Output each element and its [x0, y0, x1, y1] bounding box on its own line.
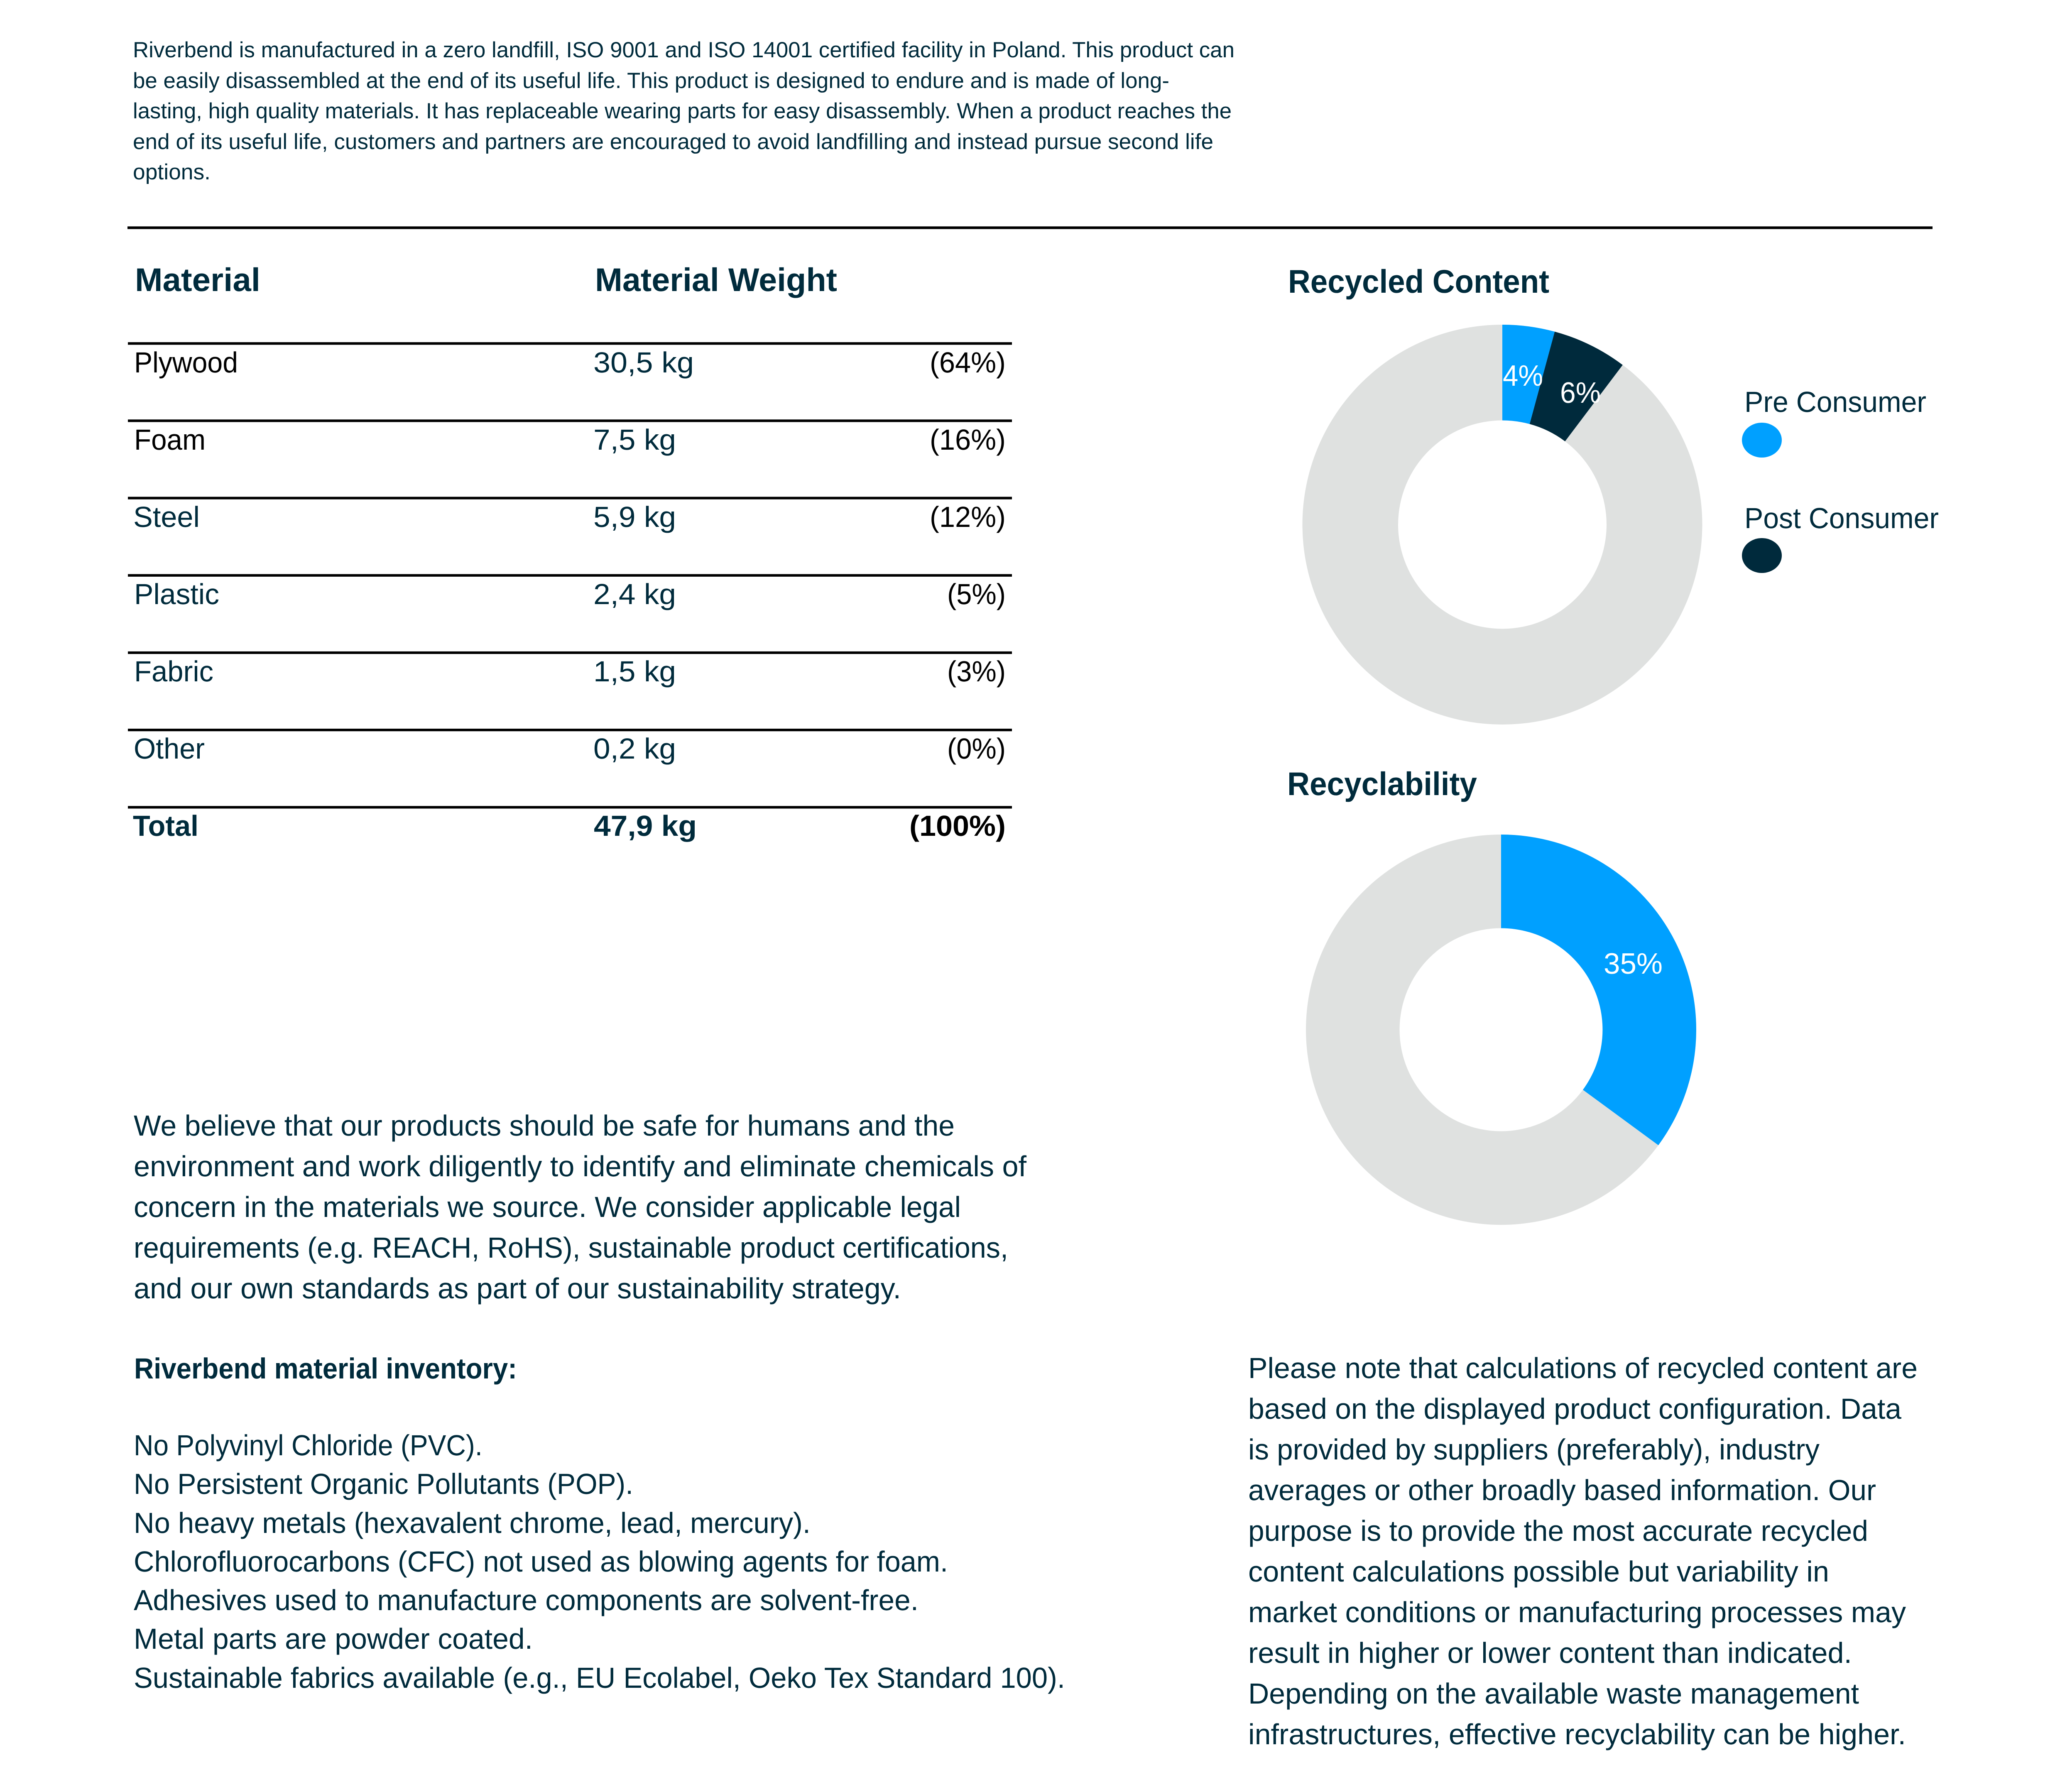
- legend item: pre consumer: Pre Consumer: [1744, 386, 1926, 418]
- text block: calculation note: purpose is to provide the most accurate recycled: [1248, 1515, 1868, 1547]
- row: plastic: (5%): [947, 578, 1006, 610]
- row: fabric: [134, 655, 1006, 688]
- text block: chemicals statement: concern in the materials we source. We consider applicable legal: [134, 1191, 961, 1223]
- row: steel: 5,9 kg: [593, 501, 676, 533]
- intro text block: end of its useful life, customers and partners are encouraged to avoid landfilling and instead pursue second life: [133, 130, 1213, 154]
- table header: Material Weight: [595, 261, 837, 298]
- row: steel: Steel: [133, 501, 200, 533]
- text block: chemicals statement: requirements (e.g. REACH, RoHS), sustainable product certifications,: [134, 1231, 1008, 1264]
- text block: chemicals statement: environment and work diligently to identify and eliminate chemicals of: [134, 1150, 1027, 1182]
- row: plastic: [134, 578, 1006, 610]
- row: plastic: 2,4 kg: [593, 578, 676, 610]
- row: plywood: Plywood: [134, 346, 238, 379]
- text block: material inventory list: Sustainable fabrics available (e.g., EU Ecolabel, Oeko Tex Standard 100).: [134, 1662, 1065, 1694]
- text block: calculation note: result in higher or lower content than indicated.: [1248, 1637, 1852, 1669]
- slice: recyclable share: [1501, 835, 1696, 1145]
- legend item: post consumer: Post Consumer: [1744, 502, 1939, 534]
- intro text block: be easily disassembled at the end of its useful life. This product is designed to endure and is made of long-: [133, 69, 1169, 93]
- donut chart: recycled content: [1302, 325, 1702, 725]
- row: foam: [134, 424, 1006, 456]
- heading: recycled content: Recycled Content: [1288, 263, 1549, 300]
- row: foam: 7,5 kg: [593, 424, 676, 456]
- slice: post consumer: [1530, 332, 1623, 441]
- row: plywood: 30,5 kg: [593, 346, 694, 379]
- row: total: (100%): [909, 810, 1006, 842]
- text block: material inventory list: No Polyvinyl Chloride (PVC).: [134, 1429, 483, 1462]
- value label: 6%: 6%: [1560, 377, 1601, 409]
- text block: calculation note: based on the displayed product configuration. Data: [1248, 1393, 1901, 1425]
- value label: 4%: 4%: [1503, 360, 1543, 392]
- row: total: Total: [133, 810, 198, 842]
- slice: pre consumer: [1502, 325, 1555, 424]
- row: other: (0%): [947, 732, 1006, 765]
- intro text block: Riverbend is manufactured in a zero landfill, ISO 9001 and ISO 14001 certified facility in Poland. This product can: [133, 38, 1235, 62]
- table header: [135, 261, 837, 298]
- legend item: post consumer: [1742, 502, 1939, 573]
- row: total: 47,9 kg: [594, 810, 697, 842]
- legend item: pre consumer: [1742, 386, 1926, 458]
- text block: material inventory list: Adhesives used to manufacture components are solvent-free.: [134, 1584, 919, 1616]
- intro text block: options.: [133, 160, 211, 184]
- table header: Material: [135, 261, 260, 298]
- text block: calculation note: Depending on the available waste management: [1248, 1677, 1859, 1710]
- donut chart: recyclability: [1306, 835, 1696, 1225]
- text block: chemicals statement: and our own standards as part of our sustainability strategy.: [134, 1272, 901, 1305]
- row: fabric: Fabric: [134, 655, 213, 688]
- row: foam: Foam: [134, 424, 206, 456]
- text block: calculation note: [1248, 1352, 1918, 1750]
- row: other: Other: [134, 732, 205, 765]
- text block: material inventory list: [134, 1429, 1065, 1694]
- text block: calculation note: averages or other broadly based information. Our: [1248, 1474, 1876, 1506]
- text block: material inventory list: No Persistent Organic Pollutants (POP).: [134, 1468, 633, 1500]
- row: plywood: (64%): [930, 346, 1006, 379]
- row: fabric: 1,5 kg: [593, 655, 676, 688]
- text block: chemicals statement: We believe that our products should be safe for humans and the: [134, 1109, 955, 1142]
- row: total: [133, 810, 1006, 842]
- text block: chemicals statement: [134, 1109, 1027, 1305]
- row: steel: [133, 501, 1006, 533]
- text block: calculation note: market conditions or manufacturing processes may: [1248, 1596, 1906, 1628]
- row: plywood: [134, 346, 1006, 379]
- intro text block: [133, 38, 1235, 184]
- text block: material inventory list: Metal parts are powder coated.: [134, 1623, 533, 1655]
- panel: material table: [128, 261, 1012, 842]
- text block: material inventory list: Chlorofluorocarbons (CFC) not used as blowing agents for foam.: [134, 1545, 948, 1578]
- text block: calculation note: content calculations possible but variability in: [1248, 1555, 1829, 1588]
- heading: recyclability: Recyclability: [1287, 765, 1477, 802]
- text block: calculation note: Please note that calculations of recycled content are: [1248, 1352, 1918, 1384]
- heading: material inventory: Riverbend material inventory:: [134, 1352, 517, 1385]
- text block: calculation note: is provided by suppliers (preferably), industry: [1248, 1433, 1820, 1466]
- legend: recycled content: [1742, 386, 1939, 573]
- text block: material inventory list: No heavy metals (hexavalent chrome, lead, mercury).: [134, 1507, 811, 1539]
- row: steel: (12%): [930, 501, 1006, 533]
- row: other: 0,2 kg: [593, 732, 676, 765]
- value label: 35%: 35%: [1604, 947, 1663, 980]
- row: other: [134, 732, 1006, 765]
- text block: calculation note: infrastructures, effective recyclability can be higher.: [1248, 1718, 1906, 1750]
- row: fabric: (3%): [947, 655, 1006, 688]
- row: plastic: Plastic: [134, 578, 219, 610]
- intro text block: lasting, high quality materials. It has replaceable wearing parts for easy disassembly. When a product reaches the: [133, 99, 1232, 123]
- row: foam: (16%): [930, 424, 1006, 456]
